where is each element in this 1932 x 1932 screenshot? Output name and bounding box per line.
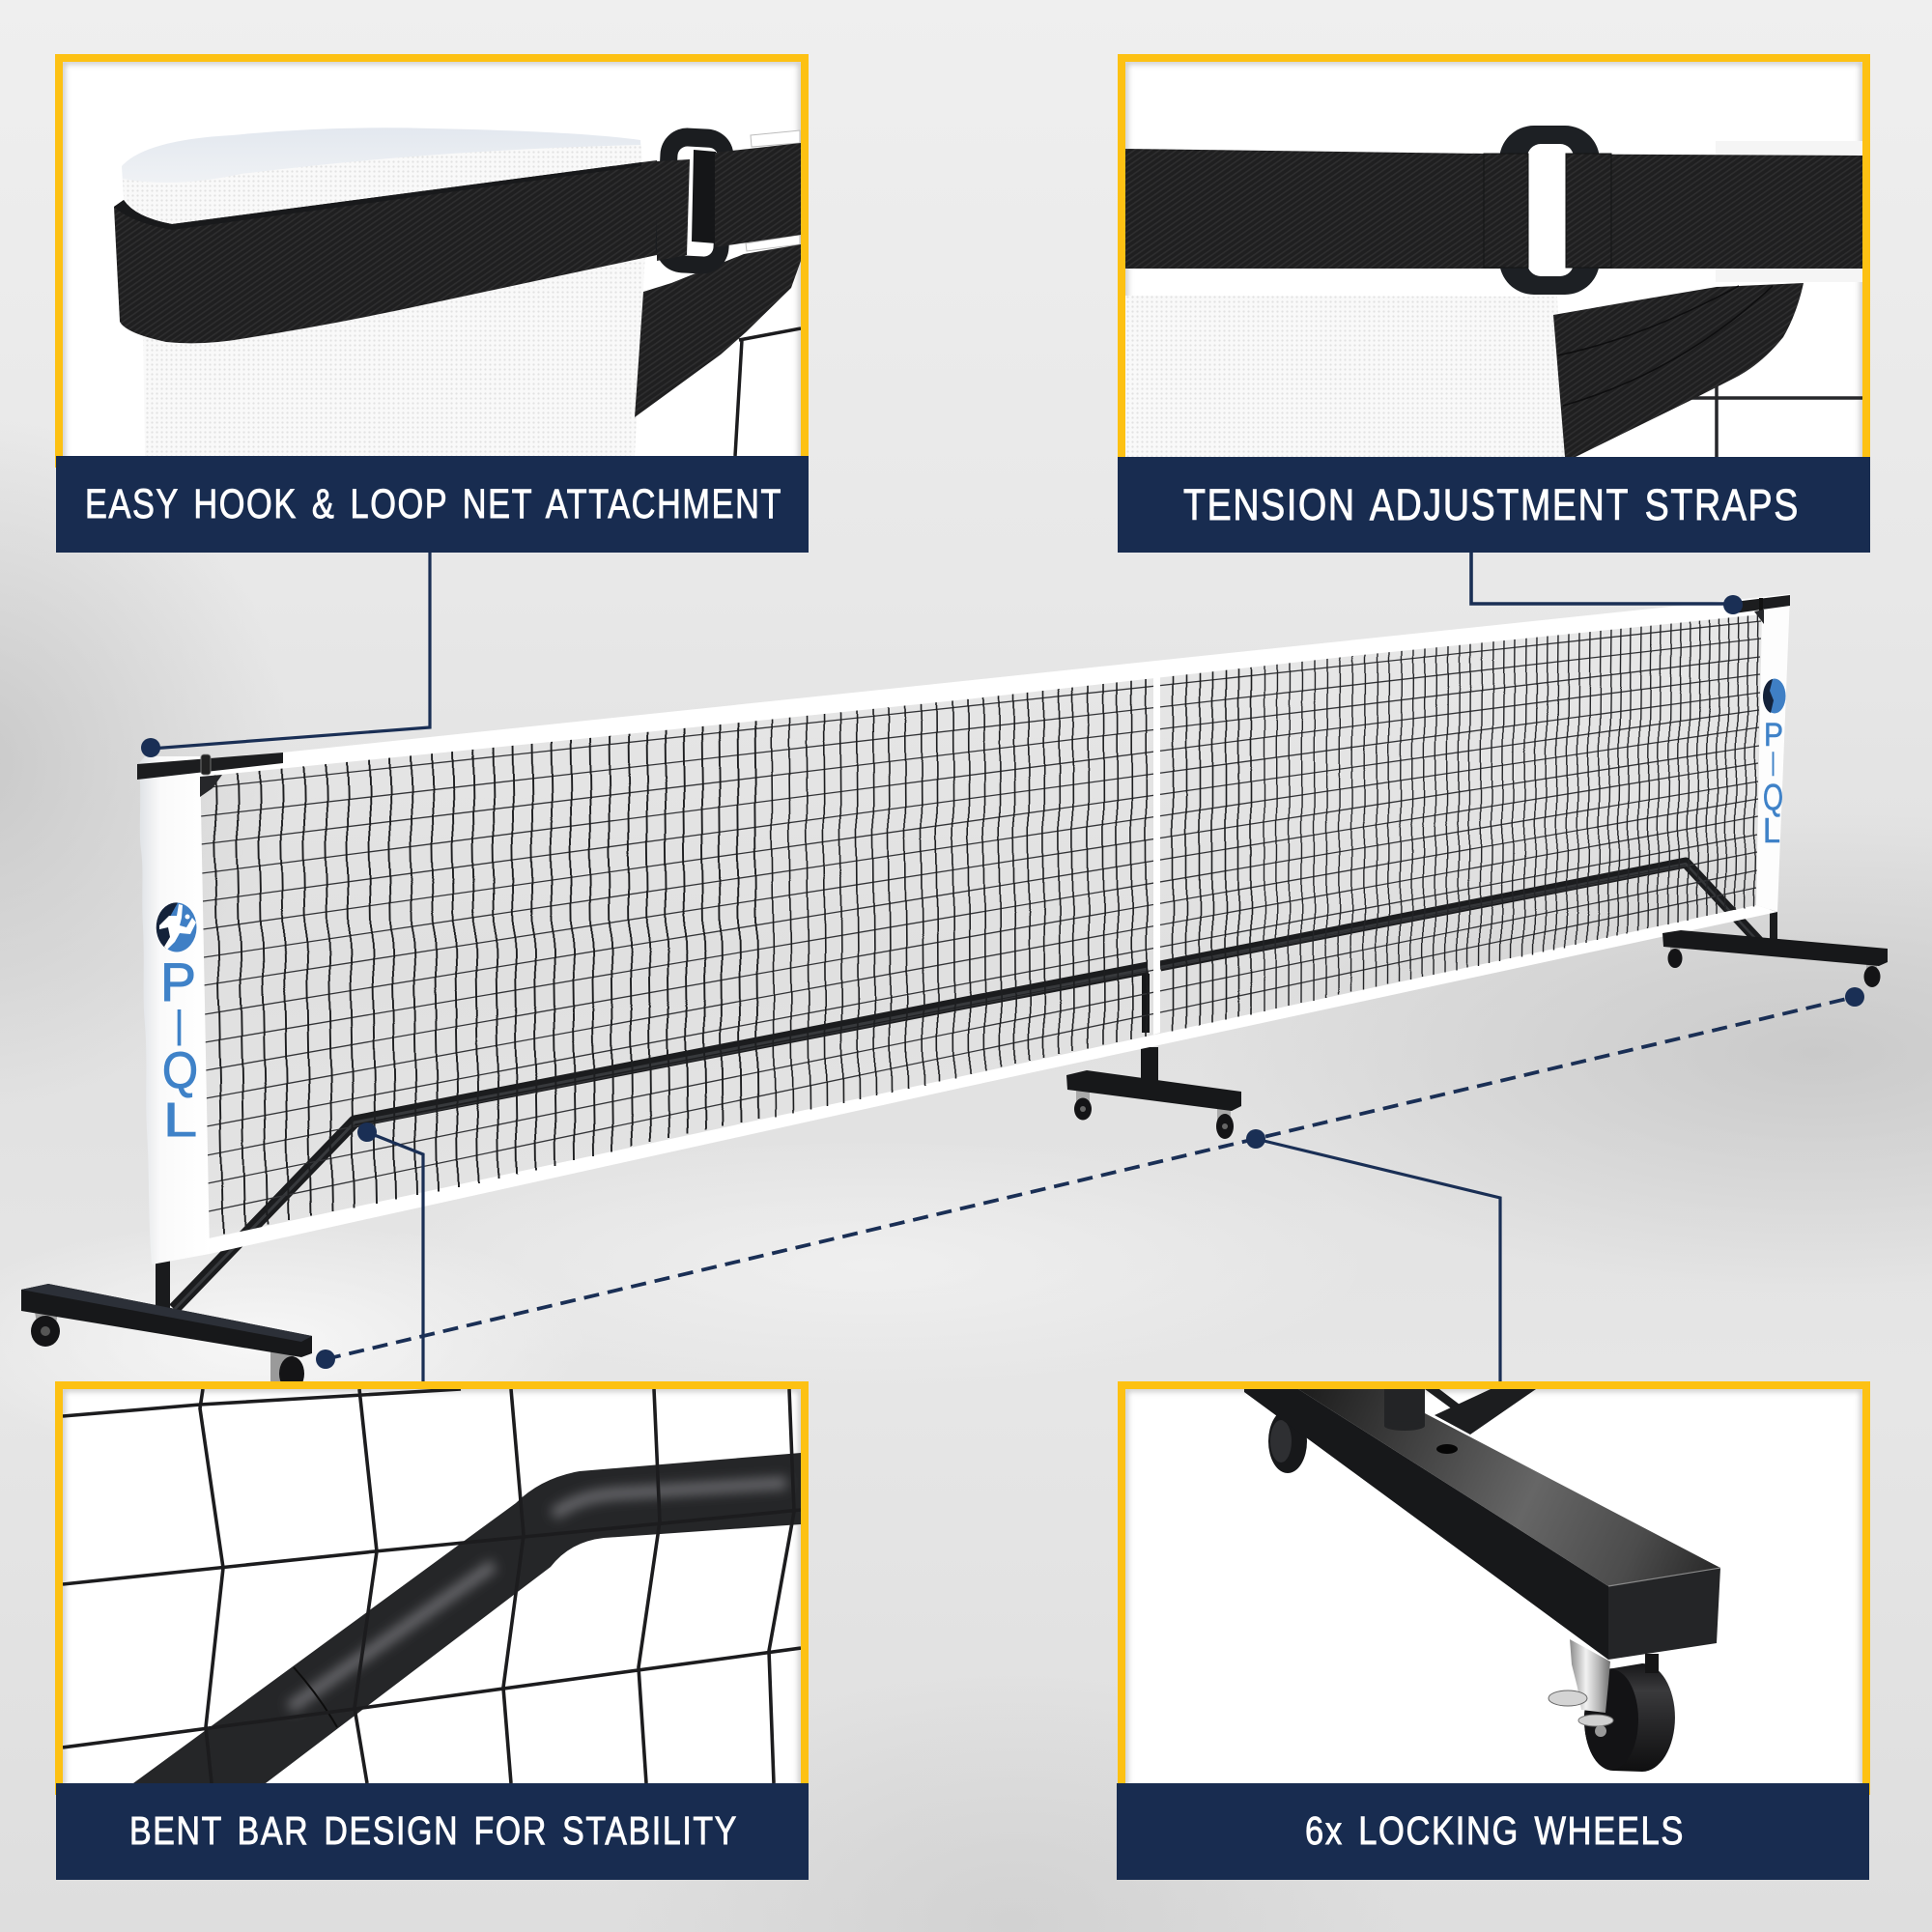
caption bar bbox=[1118, 457, 1870, 553]
bent support bar bbox=[174, 863, 1764, 1310]
panel frame bbox=[59, 58, 805, 464]
left logo: Q bbox=[162, 1042, 198, 1099]
leader dot: tension straps bbox=[1723, 595, 1743, 614]
base and wheel close-up illustration bbox=[1125, 1389, 1862, 1795]
leader line: net attachment bbox=[151, 553, 430, 749]
caption: 6x LOCKING WHEELS bbox=[1305, 1808, 1685, 1853]
front wheel bbox=[1584, 1654, 1675, 1772]
right top strap bbox=[1734, 595, 1790, 624]
center strap bbox=[1153, 665, 1160, 1035]
right post bbox=[1770, 908, 1777, 941]
leader dot: dashed line start bbox=[316, 1350, 335, 1369]
left post sleeve bbox=[139, 756, 210, 1264]
right post sleeve bbox=[1756, 594, 1790, 912]
square base beam bbox=[1244, 1389, 1720, 1660]
net mesh horizontal cords bbox=[200, 621, 1761, 1211]
center base bbox=[1066, 1070, 1241, 1139]
left post bbox=[156, 1261, 170, 1313]
panel: easy hook and loop net attachment bbox=[56, 58, 809, 553]
caption bar bbox=[56, 456, 809, 553]
left logo: L bbox=[163, 1094, 197, 1147]
net mesh vertical cords left bbox=[214, 717, 758, 1236]
dashed dimension line bbox=[326, 997, 1855, 1359]
caption bar bbox=[1117, 1783, 1869, 1880]
strap close-up illustration bbox=[63, 62, 801, 468]
caption: TENSION ADJUSTMENT STRAPS bbox=[1183, 480, 1800, 529]
caption bar bbox=[56, 1783, 809, 1880]
right logo: P bbox=[1764, 717, 1783, 753]
panel frame bbox=[59, 1385, 805, 1791]
net mesh vertical cords right bbox=[1264, 612, 1758, 1011]
leader dot: net attachment bbox=[141, 738, 160, 757]
leader dot: wheels bbox=[1246, 1129, 1265, 1149]
pickleball net assembly bbox=[21, 594, 1888, 1391]
right base bbox=[1662, 930, 1888, 987]
leader dot: dashed line end bbox=[1845, 987, 1864, 1007]
right logo bbox=[1763, 678, 1785, 850]
panel frame bbox=[1122, 1385, 1866, 1791]
panel: locking wheels bbox=[1117, 1385, 1869, 1880]
leader line: tension straps bbox=[1471, 553, 1733, 604]
caption: EASY HOOK & LOOP NET ATTACHMENT bbox=[85, 481, 782, 527]
panel frame bbox=[1122, 58, 1866, 464]
caption: BENT BAR DESIGN FOR STABILITY bbox=[129, 1808, 738, 1853]
right logo: I bbox=[1771, 746, 1776, 783]
front caster bracket bbox=[1548, 1639, 1613, 1737]
leader line: bent bar bbox=[367, 1132, 423, 1383]
panel: tension adjustment straps bbox=[1118, 58, 1870, 553]
right logo: Q bbox=[1763, 778, 1783, 818]
leader line: wheels bbox=[1256, 1139, 1500, 1383]
right logo: L bbox=[1763, 810, 1780, 850]
bottom net band bbox=[209, 905, 1777, 1254]
left logo: I bbox=[175, 1000, 184, 1057]
left top strap bbox=[137, 753, 283, 797]
left base bbox=[21, 1284, 312, 1391]
left logo bbox=[156, 902, 198, 1147]
bent bar close-up illustration bbox=[63, 1389, 801, 1795]
diagonal brace bbox=[1425, 1389, 1536, 1435]
panel: bent bar design bbox=[56, 1385, 809, 1880]
left logo: P bbox=[160, 952, 196, 1012]
net mesh vertical cords center bbox=[771, 666, 1251, 1117]
leader dot: bent bar bbox=[357, 1122, 377, 1142]
strap and slider close-up illustration bbox=[1125, 62, 1862, 468]
rear wheel bbox=[1268, 1409, 1307, 1473]
top net band bbox=[200, 594, 1790, 777]
center post bbox=[1141, 974, 1158, 1083]
